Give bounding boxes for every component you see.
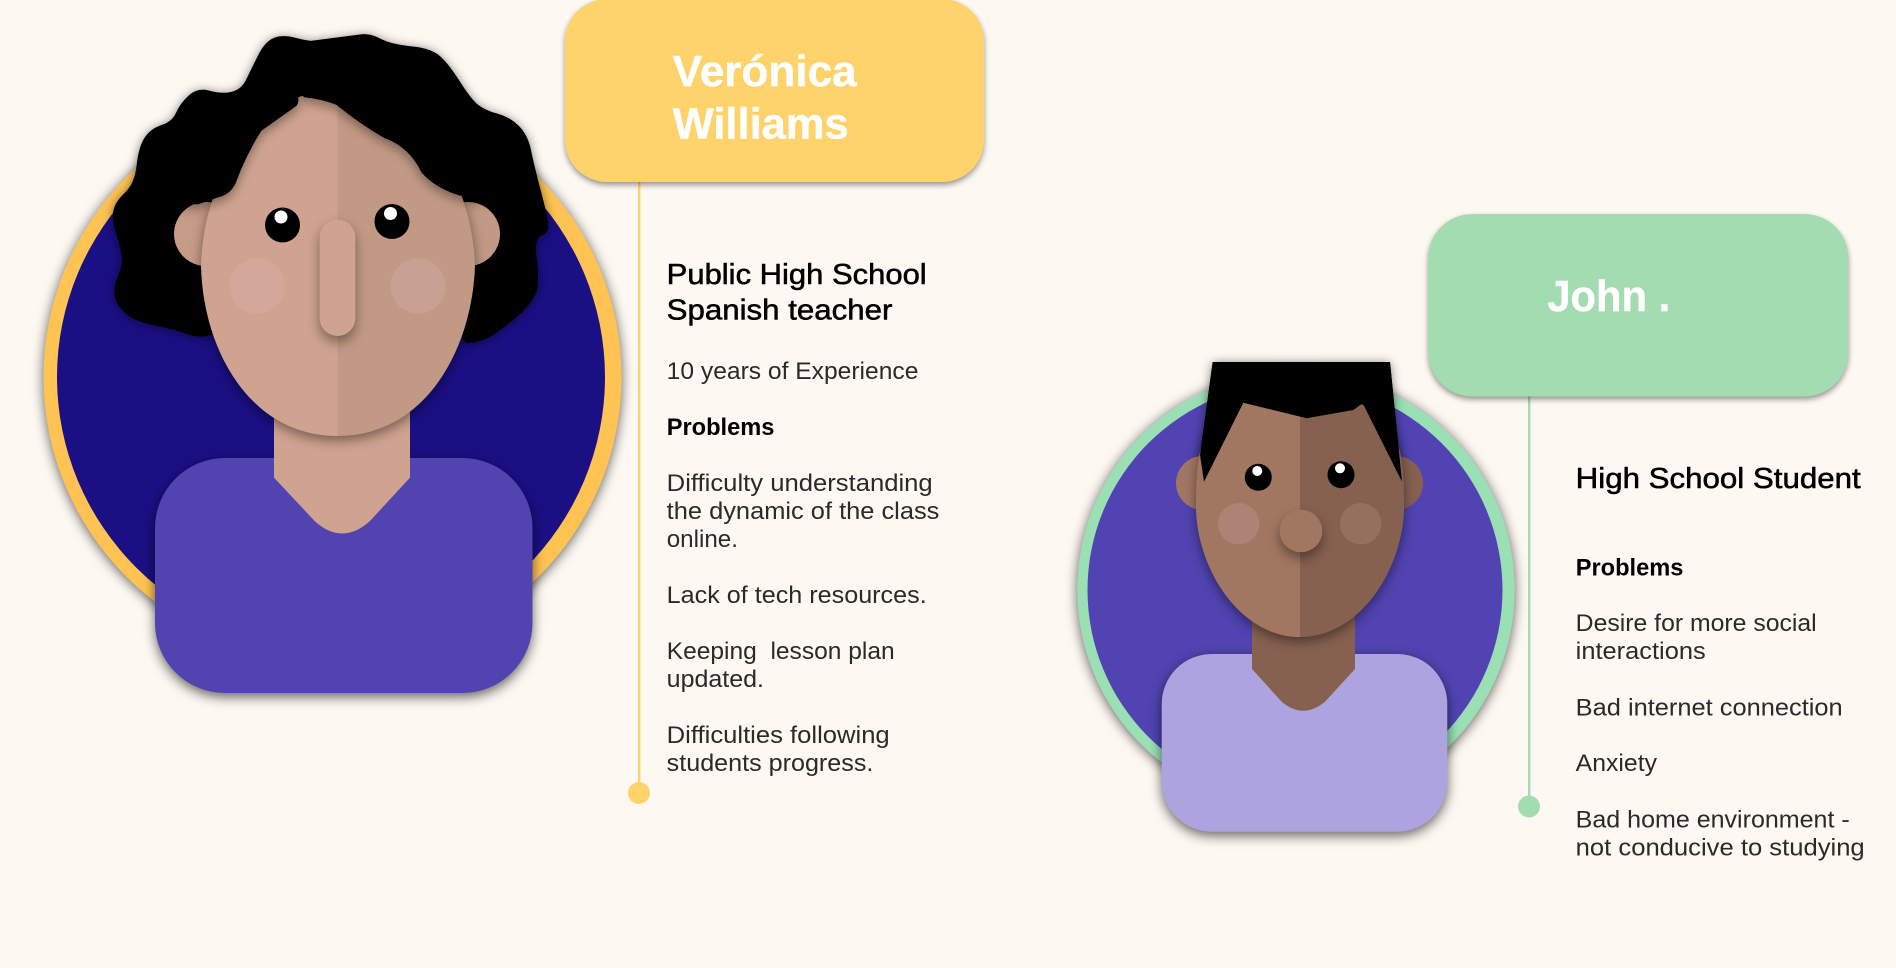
connector line and end dot [628, 182, 650, 804]
name card: Verónica Williams [565, 0, 984, 182]
name card: John [1428, 214, 1848, 396]
neck [274, 400, 410, 534]
problem list [1576, 610, 1865, 862]
panel: Verónica Williams persona [44, 0, 984, 804]
avatar ring: yellow and navy circle [44, 92, 622, 662]
problem list: Difficulty understanding [667, 470, 933, 497]
hair [1200, 362, 1402, 482]
problem list: online. [667, 526, 738, 553]
avatar ring: green and purple circle [1077, 371, 1515, 809]
problem list: Lack of tech resources. [667, 582, 927, 609]
back hair [113, 34, 548, 343]
avatar: Verónica [44, 34, 622, 693]
problem list: students progress. [667, 750, 873, 777]
problem list: the dynamic of the class [667, 498, 939, 525]
name card: John: John . [1547, 273, 1670, 321]
ears [174, 202, 500, 266]
problem list: Bad home environment - [1576, 806, 1850, 834]
left eye [1245, 464, 1272, 491]
problem list: Bad internet connection [1576, 694, 1843, 722]
left cheek [1218, 503, 1259, 544]
right cheek [1340, 503, 1381, 544]
problems heading: Problems [1576, 554, 1683, 582]
nose [1280, 510, 1322, 552]
connector line and end dot [1518, 396, 1540, 818]
problem list: updated. [667, 666, 764, 693]
problem list [667, 470, 939, 777]
text block: role and problems [1576, 463, 1865, 862]
avatar: John [1077, 362, 1515, 832]
face [1196, 395, 1404, 637]
role heading: Spanish teacher [667, 294, 893, 326]
problem list: Keeping lesson plan [667, 638, 895, 665]
hair shadow halo [1200, 362, 1402, 482]
role heading: Public High School [667, 259, 927, 291]
nose [320, 220, 355, 336]
left eye [265, 208, 300, 242]
name card: Verónica Williams: Williams [673, 101, 849, 149]
problem list: not conducive to studying [1576, 834, 1865, 862]
problems heading: Problems [667, 414, 774, 441]
fringe hair [154, 46, 530, 204]
neck [1252, 600, 1355, 711]
right eye [1328, 461, 1354, 488]
right eye [374, 204, 410, 239]
problem list: Anxiety [1576, 750, 1658, 777]
problem list: interactions [1576, 638, 1706, 665]
torso: lilac shirt [1162, 654, 1447, 832]
problem list: Desire for more social [1576, 610, 1817, 637]
name card: Verónica Williams: Verónica [673, 48, 858, 96]
face [201, 90, 475, 436]
left cheek [230, 258, 284, 314]
text block: role and problems [667, 259, 939, 777]
ears [1176, 456, 1423, 510]
role heading [667, 259, 927, 326]
problem list: Difficulties following [667, 722, 890, 749]
panel: John persona [1077, 214, 1865, 862]
torso: purple shirt [155, 458, 532, 693]
right cheek [390, 258, 446, 314]
role heading: High School Student [1576, 463, 1861, 495]
experience: 10 years of Experience [667, 358, 918, 385]
